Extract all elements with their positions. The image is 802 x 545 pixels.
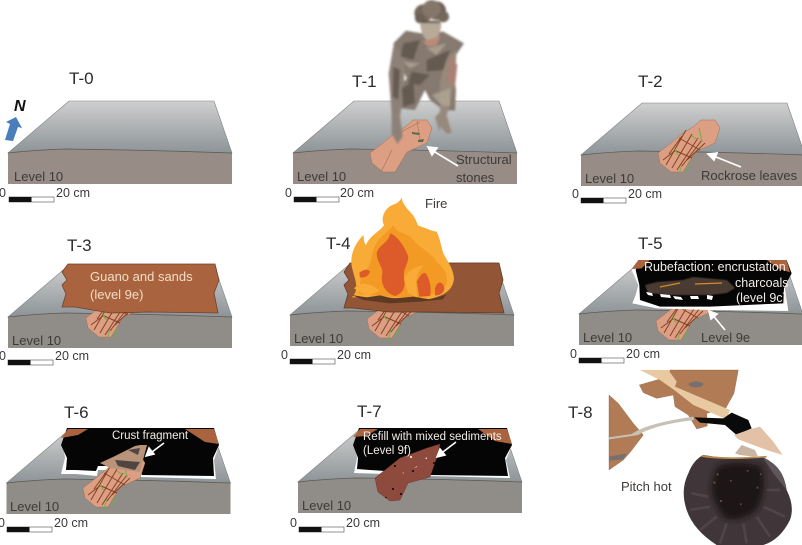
label: Fire: Fire <box>425 196 447 211</box>
label: Structural stones: Structural <box>456 152 512 167</box>
scale bar: 20 cm <box>56 186 90 200</box>
stones under slab <box>367 286 429 340</box>
label: Refill with mixed sediments: Refill with mixed sediments <box>363 431 502 443</box>
sediment block <box>6 431 230 514</box>
scale bar: 20 cm <box>628 187 662 201</box>
sediment block <box>298 430 522 513</box>
scale bar <box>290 516 380 532</box>
label: Level 9e: Level 9e <box>701 330 750 345</box>
sediment block <box>579 262 802 345</box>
scale bar <box>285 186 374 202</box>
scale bar: 20 cm <box>346 516 380 530</box>
scale bar: 20 cm <box>340 186 374 200</box>
arrow: to rockrose leaves <box>708 153 741 167</box>
panel: T-2 rockrose leaves <box>572 72 802 203</box>
crust fragment <box>100 445 147 472</box>
heading: T-3: T-3 <box>67 236 92 255</box>
scale bar: 0 <box>572 187 579 201</box>
stones under slab <box>86 285 148 339</box>
label: Level 10: Level 10 <box>294 331 343 346</box>
slab: black crust with rim <box>353 428 512 478</box>
illustration: hands hafting a stone point over shell <box>609 370 792 545</box>
scale bar: 20 cm <box>54 516 88 530</box>
scale bar: 0 <box>285 186 292 200</box>
heading: T-0: T-0 <box>69 69 94 88</box>
sediment block <box>581 103 802 186</box>
point base <box>735 445 758 457</box>
label: Level 10: Level 10 <box>585 171 634 186</box>
pitch <box>694 413 752 435</box>
heading: T-6: T-6 <box>64 403 89 422</box>
thumbnail <box>689 381 703 387</box>
scale bar <box>570 347 660 363</box>
crust detail <box>115 448 140 470</box>
panel: T-1 structural stones <box>285 0 517 202</box>
label: Pitch hot: Pitch hot <box>621 479 672 494</box>
scale bar: 0 <box>290 516 297 530</box>
stones with leaves <box>658 120 720 174</box>
heading: T-7: T-7 <box>357 402 382 421</box>
label: Crust fragment: Crust fragment <box>112 430 189 442</box>
illustration: crouching person <box>389 0 464 144</box>
panel: T-6 crust fragment <box>0 403 230 532</box>
arrow: to crust fragment <box>146 443 164 456</box>
heading: T-1: T-1 <box>352 72 377 91</box>
heading: T-4: T-4 <box>326 234 351 253</box>
right hand <box>639 370 738 429</box>
label: Level 10: Level 10 <box>10 499 59 514</box>
label: Level 10: Level 10 <box>297 169 346 184</box>
slab: black crust with rim <box>61 428 219 479</box>
sediment block <box>293 101 517 184</box>
label: charcoals: charcoals <box>735 276 788 290</box>
label: Guano and sands: Guano and sands <box>90 269 193 284</box>
illustration: charcoal encrustation <box>645 277 735 300</box>
icon: north arrow <box>5 98 26 141</box>
heading: T-5: T-5 <box>638 234 663 253</box>
scale bar <box>0 516 88 532</box>
scale bar <box>0 349 89 365</box>
panel: T-3 guano and sands <box>0 236 232 365</box>
heading: T-2: T-2 <box>638 72 663 91</box>
label: Level 10: Level 10 <box>12 333 61 348</box>
arrow: to level 9e <box>709 311 725 330</box>
heading: T-8: T-8 <box>568 403 593 422</box>
illustration: flames <box>351 197 454 303</box>
stones under slab <box>656 288 718 342</box>
slab: burnt surface <box>344 263 504 313</box>
panel: T-4 fire <box>281 196 514 364</box>
left hand <box>609 395 643 470</box>
sediment block <box>290 263 514 346</box>
stick with pitch <box>609 417 694 439</box>
arrow: to structural stones <box>428 147 458 166</box>
label: Level 10: Level 10 <box>302 498 351 513</box>
label: Level 10: Level 10 <box>14 169 63 184</box>
refill patch <box>375 444 440 501</box>
scale bar: 0 <box>570 347 577 361</box>
slab: guano and sands <box>62 264 219 313</box>
label: Rubefaction encrustation: Rubefaction: encrustation <box>644 260 786 274</box>
sediment block <box>8 101 232 184</box>
wooden haft <box>640 370 730 419</box>
label: Rockrose leaves: Rockrose leaves <box>701 168 798 183</box>
panel: T-0 initial surface <box>0 69 232 202</box>
label: stones: stones <box>456 170 495 185</box>
scale bar: 0 <box>281 348 288 362</box>
scale bar: 20 cm <box>55 349 89 363</box>
stone point <box>734 427 783 455</box>
label: Level 9f: (Level 9f) <box>363 445 411 457</box>
label: Level 10: Level 10 <box>583 330 632 345</box>
scale bar: 20 cm <box>626 347 660 361</box>
stones patch <box>370 120 432 172</box>
slab: level 9e with white rim <box>632 260 792 311</box>
label: level 9e: (level 9e) <box>90 287 143 302</box>
sediment block <box>8 265 232 348</box>
scale bar <box>572 187 662 203</box>
left thumbnail <box>609 453 627 461</box>
panel: T-8 pitch hot <box>568 370 792 545</box>
arrow: to refill <box>437 442 456 457</box>
panel: T-5 rubefaction <box>570 234 802 363</box>
scallop shell with pitch <box>684 455 792 545</box>
panel: T-7 refill <box>290 402 522 532</box>
label: level 9c: (level 9c) <box>736 291 787 305</box>
scale bar <box>281 348 371 364</box>
stones with roots <box>83 455 145 509</box>
scale bar: 20 cm <box>337 348 371 362</box>
icon: north arrow: N <box>14 98 26 115</box>
scale bar <box>0 186 90 202</box>
